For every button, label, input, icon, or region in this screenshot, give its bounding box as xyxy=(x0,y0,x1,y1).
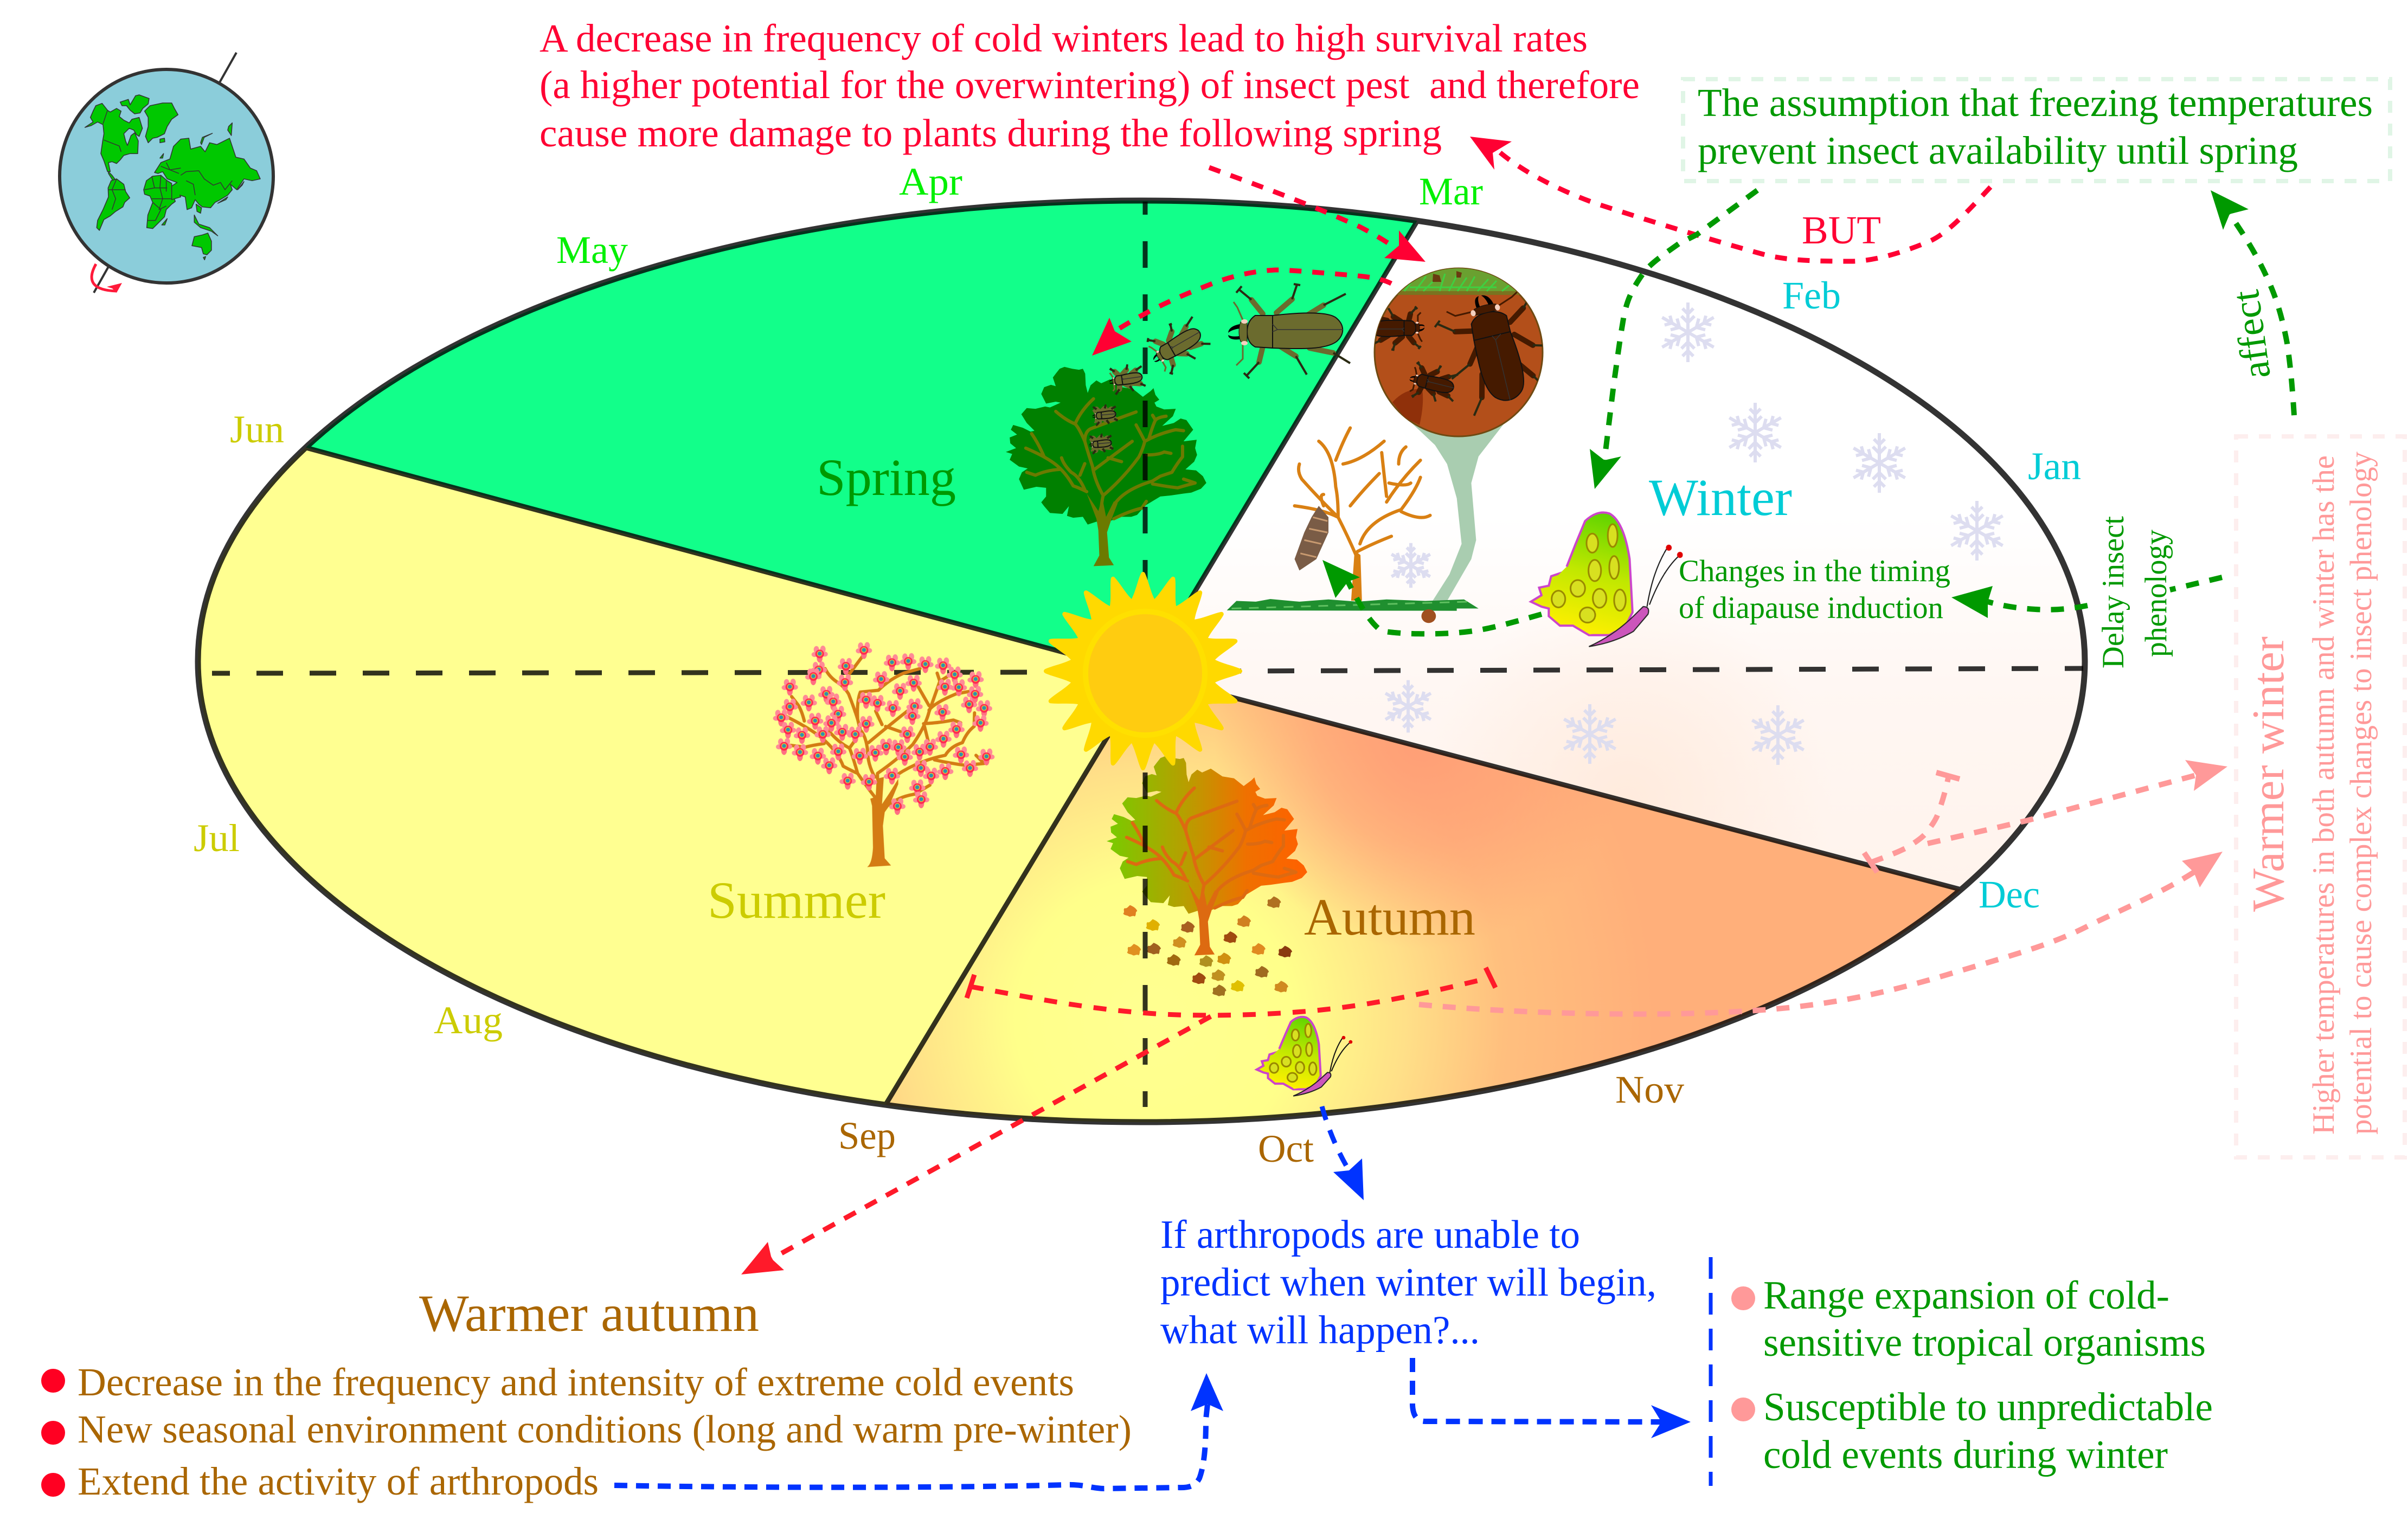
arrow: extended activity to question xyxy=(614,1373,1223,1489)
warmer winter box: Warmer winter xyxy=(2243,636,2294,912)
red text: decrease in cold winters xyxy=(540,16,1640,155)
winter snowflakes xyxy=(1383,302,2006,765)
winter range bracket xyxy=(1864,772,1960,872)
dashed axes xyxy=(212,202,2083,1107)
autumn butterfly xyxy=(1257,1017,1352,1096)
spring beetles climbing the tree xyxy=(1088,284,1350,454)
arrow: autumn to warmer autumn xyxy=(741,1016,1211,1274)
assumption box: The assumption that freezing temperatures xyxy=(1698,81,2373,125)
arrow: question to consequences xyxy=(1412,1358,1691,1438)
month labels: Sep xyxy=(838,1114,896,1157)
chrysalis on bare tree xyxy=(1295,506,1328,570)
consequences divider xyxy=(1709,1257,1712,1486)
grass strip with seed xyxy=(1227,599,1479,623)
autumn falling leaves xyxy=(1123,896,1292,996)
blossoms xyxy=(773,642,994,815)
summer blossom tree xyxy=(773,642,994,867)
warmer autumn heading: Warmer autumn xyxy=(419,1284,759,1342)
arrow: beetles emerging to spring tree xyxy=(1092,270,1391,356)
consequences bullet list: Range expansion of cold- xyxy=(1763,1273,2169,1318)
season labels xyxy=(708,448,1792,946)
month labels: Oct xyxy=(1258,1127,1314,1170)
month labels: Feb xyxy=(1782,274,1841,317)
consequences bullet list: Susceptible to unpredictable xyxy=(1763,1385,2213,1430)
blue question text: If arthropods are unable to xyxy=(1160,1213,1580,1257)
season labels: Summer xyxy=(708,871,885,929)
month labels: Dec xyxy=(1979,873,2040,916)
warmer autumn bullet list xyxy=(41,1360,1132,1503)
continents xyxy=(85,95,260,260)
red text: decrease in cold winters: cause more damage to plants during the following spring xyxy=(540,111,1442,155)
month labels xyxy=(194,160,2081,1170)
sector: spring xyxy=(306,201,1417,652)
red text: decrease in cold winters: A decrease in frequency of cold winters lead to high survival rates xyxy=(540,16,1588,60)
arrow: delay phenology to diapause xyxy=(1951,577,2222,618)
warmer autumn bullet list: Decrease in the frequency and intensity of extreme cold events xyxy=(78,1360,1074,1404)
affect label: affect xyxy=(2224,287,2279,382)
arrow: butterfly to chrysalis xyxy=(1322,560,1542,634)
BUT label: BUT xyxy=(1802,208,1881,252)
month labels: May xyxy=(556,228,628,272)
season labels: Winter xyxy=(1649,468,1792,526)
winter butterfly xyxy=(1531,512,1683,647)
orbit ellipse with season sectors xyxy=(195,197,2088,1125)
month labels: Apr xyxy=(899,160,962,203)
sector: autumn xyxy=(885,698,1961,1122)
arrow: autumn butterfly to question xyxy=(1322,1106,1364,1200)
warmer autumn bullet list: New seasonal environment conditions (long and warm pre-winter) xyxy=(78,1407,1132,1451)
month labels: Nov xyxy=(1615,1068,1684,1111)
blue question text: what will happen?... xyxy=(1160,1308,1480,1353)
diapause label xyxy=(1679,554,1950,625)
autumn tree xyxy=(1107,756,1307,955)
arrow: assumption to winter butterfly xyxy=(1590,190,1757,489)
blue question text: predict when winter will begin, xyxy=(1160,1260,1656,1305)
warmer autumn bullet list: Extend the activity of arthropods xyxy=(78,1459,599,1503)
season labels: Autumn xyxy=(1304,888,1475,946)
globe with rotation axis xyxy=(60,53,273,293)
consequences bullet list: cold events during winter xyxy=(1763,1433,2168,1477)
sun xyxy=(1046,574,1240,768)
winter bare tree xyxy=(1295,428,1430,600)
arrow: decrease text to overwintering soil xyxy=(1209,168,1425,262)
delay insect phenology label: Delay insect xyxy=(2096,516,2130,668)
sector: summer xyxy=(198,448,1107,1105)
month labels: Aug xyxy=(434,999,503,1042)
spring tree xyxy=(1006,367,1206,566)
delay insect phenology label xyxy=(2096,516,2173,668)
sector: winter xyxy=(198,201,2085,1122)
delay insect phenology label: phenology xyxy=(2139,530,2173,657)
season labels: Spring xyxy=(817,448,956,506)
autumn range bracket xyxy=(967,968,1495,1015)
warmer winter box xyxy=(2236,436,2405,1157)
arrow: winter range to warmer winter xyxy=(1928,760,2227,844)
consequences bullet list xyxy=(1731,1273,2213,1477)
overwintering beetles in soil xyxy=(1374,268,1543,437)
diapause label: Changes in the timing xyxy=(1679,554,1950,588)
diapause stem funnel xyxy=(1411,422,1505,601)
warmer winter box: Higher temperatures in both autumn and winter has the xyxy=(2307,455,2341,1135)
arrow: autumn range to warmer winter xyxy=(1419,852,2223,1014)
consequences bullet list: sensitive tropical organisms xyxy=(1763,1321,2206,1365)
arrow: affect xyxy=(2211,190,2294,415)
assumption box: prevent insect availability until spring xyxy=(1698,128,2298,172)
month labels: Jul xyxy=(194,816,240,860)
warmer winter box: potential to cause complex changes to insect phenology xyxy=(2344,452,2378,1135)
diapause label: of diapause induction xyxy=(1679,591,1943,625)
month labels: Mar xyxy=(1419,170,1483,213)
month labels: Jun xyxy=(230,408,284,451)
month labels: Jan xyxy=(2028,445,2081,488)
red text: decrease in cold winters: (a higher potential for the overwintering) of insect pest and therefore xyxy=(540,63,1640,107)
arrow: BUT link to red text xyxy=(1470,137,1990,261)
blue question text xyxy=(1160,1213,1656,1353)
assumption box xyxy=(1683,79,2390,181)
